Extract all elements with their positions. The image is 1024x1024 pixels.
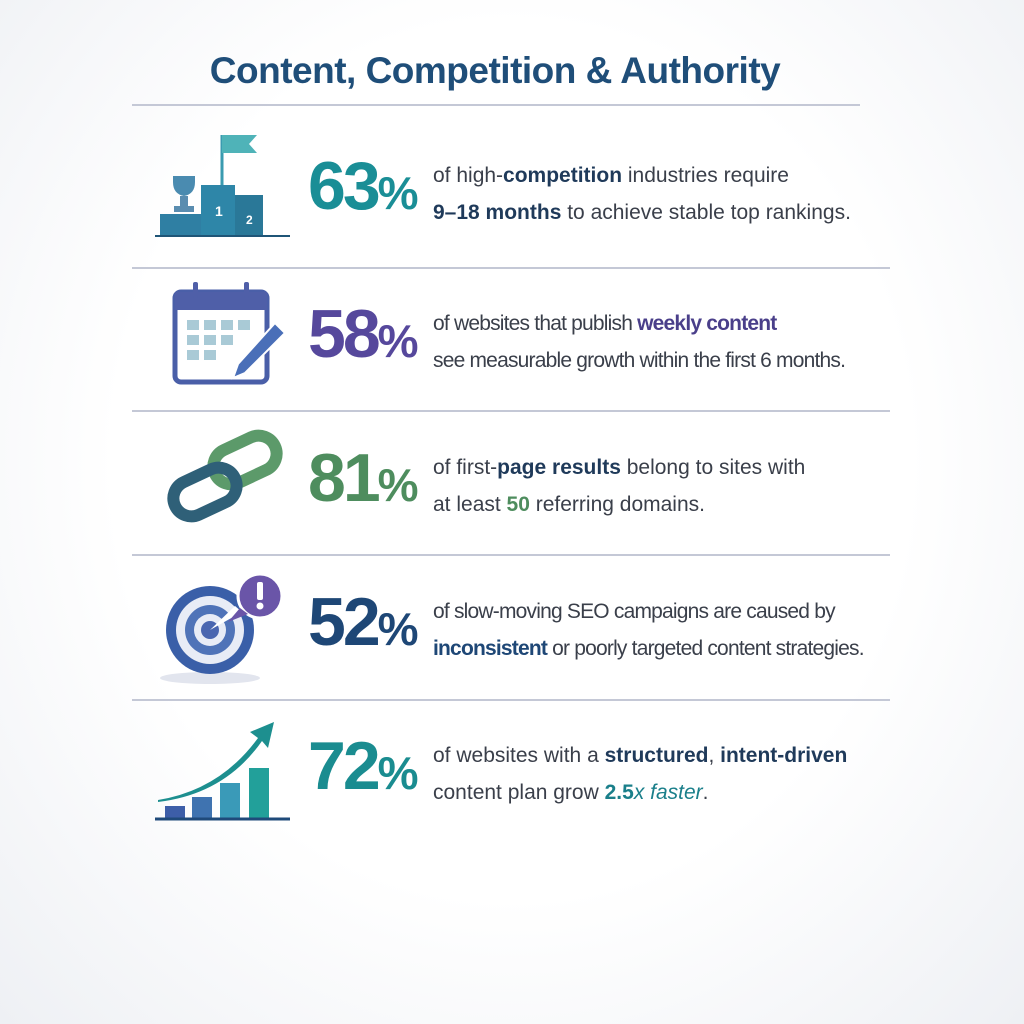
text: at least 50 referring domains.	[433, 493, 705, 516]
row 4: inconsistent content	[160, 576, 864, 684]
text	[433, 164, 851, 224]
text: see measurable growth within the first 6 months.	[433, 349, 845, 372]
row 5: growth	[155, 722, 847, 820]
icon: growth chart	[155, 722, 290, 820]
text	[433, 744, 847, 804]
row 1: competition	[155, 135, 851, 237]
stat 63%: 63%	[308, 148, 419, 224]
stat 58%: 58%	[308, 296, 419, 372]
icon: target with alert	[160, 576, 280, 684]
icon: calendar	[172, 282, 284, 384]
text	[433, 456, 805, 516]
text: 9–18 months to achieve stable top rankings.	[433, 201, 851, 224]
text	[433, 312, 845, 372]
text: of websites that publish weekly content	[433, 312, 776, 335]
text: of high-competition industries require	[433, 164, 789, 187]
stat 52%: 52%	[308, 584, 419, 660]
text: of slow-moving SEO campaigns are caused by	[433, 600, 835, 623]
stat 72%: 72%	[308, 728, 419, 804]
icon: podium: 2	[246, 213, 253, 227]
icon: chain link	[167, 430, 283, 522]
title: Content, Competition & Authority	[210, 50, 780, 91]
row 2: weekly content	[172, 282, 845, 384]
text: of first-page results belong to sites with	[433, 456, 805, 479]
row 3: backlinks	[167, 430, 805, 522]
text: of websites with a structured, intent-driven	[433, 744, 847, 767]
text: inconsistent or poorly targeted content strategies.	[433, 637, 864, 660]
icon: podium: 1	[215, 203, 223, 219]
text: content plan grow 2.5x faster.	[433, 781, 709, 804]
text	[433, 600, 864, 660]
icon: podium	[155, 135, 290, 237]
stat 81%: 81%	[308, 440, 419, 516]
